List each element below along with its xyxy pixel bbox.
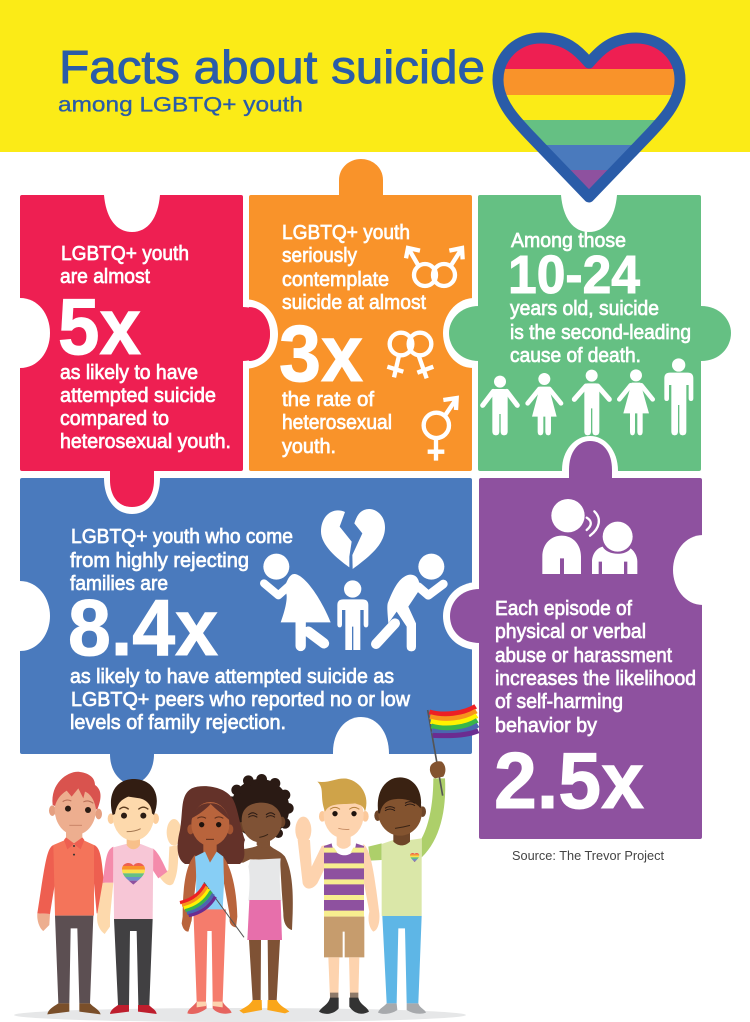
person: blond boy in striped tank [295, 778, 379, 1014]
text block: orange panel: contemplate [282, 268, 389, 291]
icon: person speaking to another [542, 499, 637, 574]
text block: purple panel: behavior by [495, 714, 598, 737]
person: girl with long hair and flag [178, 786, 245, 1014]
icon: broken heart and family [263, 509, 444, 651]
text block: blue panel: families are [70, 572, 168, 595]
red tab with gap over blue [104, 471, 160, 514]
text block: orange panel: the rate of [282, 388, 374, 411]
text block: green panel: cause of death. [510, 344, 641, 367]
text block: orange panel [279, 221, 426, 458]
text block: orange panel: LGBTQ+ youth [282, 221, 410, 244]
text block: red panel [58, 242, 231, 453]
ground shadow [14, 1008, 466, 1022]
text block: green panel [508, 229, 691, 367]
text block: green panel: is the second-leading [510, 321, 691, 344]
text block: green panel: years old, suicide [510, 297, 659, 320]
text block: orange panel: suicide at almost [282, 291, 426, 314]
icon: five people [483, 358, 693, 435]
text block: red panel: LGBTQ+ youth [61, 242, 189, 265]
text block: blue panel [68, 525, 410, 734]
panel: green puzzle piece [449, 195, 731, 471]
text block: green panel: 10-24 [508, 245, 640, 305]
text block: orange panel: heterosexual [282, 411, 392, 434]
text block: blue panel: LGBTQ+ peers who reported no or low [71, 688, 410, 711]
panel: red puzzle piece [20, 195, 270, 471]
source note: Source: The Trevor Project [512, 848, 664, 863]
subtitle: among LGBTQ+ youth [58, 92, 303, 116]
text block: blue panel: 8.4x [68, 583, 218, 672]
text block: red panel: attempted suicide [60, 384, 216, 407]
text block: red panel: compared to [60, 407, 169, 430]
text block: purple panel: abuse or harassment [495, 644, 672, 667]
panel: purple puzzle piece [443, 441, 703, 839]
text block: purple panel: increases the likelihood [495, 667, 696, 690]
person: man with raised flag [368, 706, 478, 1014]
text block: red panel: heterosexual youth. [60, 430, 231, 453]
text block: purple panel: physical or verbal [495, 620, 646, 643]
text block: red panel: are almost [60, 265, 150, 288]
text block: purple panel: 2.5x [494, 736, 644, 825]
text block: purple panel: Each episode of [495, 597, 632, 620]
text block: purple panel [494, 597, 696, 825]
text block: red panel: 5x [58, 282, 141, 371]
small rainbow flag [180, 882, 244, 937]
person: red-haired man [37, 772, 110, 1014]
text block: red panel: as likely to have [60, 361, 198, 384]
text block: purple panel: of self-harming [495, 690, 623, 713]
large rainbow flag [429, 706, 478, 736]
title: Facts about suicide [59, 41, 485, 93]
text block: orange panel: 3x [279, 309, 363, 398]
panel: blue puzzle piece [20, 478, 472, 785]
panel: orange puzzle piece [243, 159, 473, 471]
text block: blue panel: levels of family rejection. [70, 711, 286, 734]
icons: gender symbols [387, 248, 463, 461]
person: boy in pink t-shirt [97, 779, 181, 1014]
text block: orange panel: seriously [282, 244, 358, 267]
text block: orange panel: youth. [282, 435, 336, 458]
text block: blue panel: from highly rejecting [70, 549, 249, 572]
header band [0, 0, 750, 152]
text block: blue panel: as likely to have attempted suicide as [70, 665, 394, 688]
text block: green panel: Among those [511, 229, 626, 252]
icon: rainbow heart [490, 30, 690, 202]
person: curly-haired girl [226, 774, 294, 1013]
text block: blue panel: LGBTQ+ youth who come [71, 525, 293, 548]
